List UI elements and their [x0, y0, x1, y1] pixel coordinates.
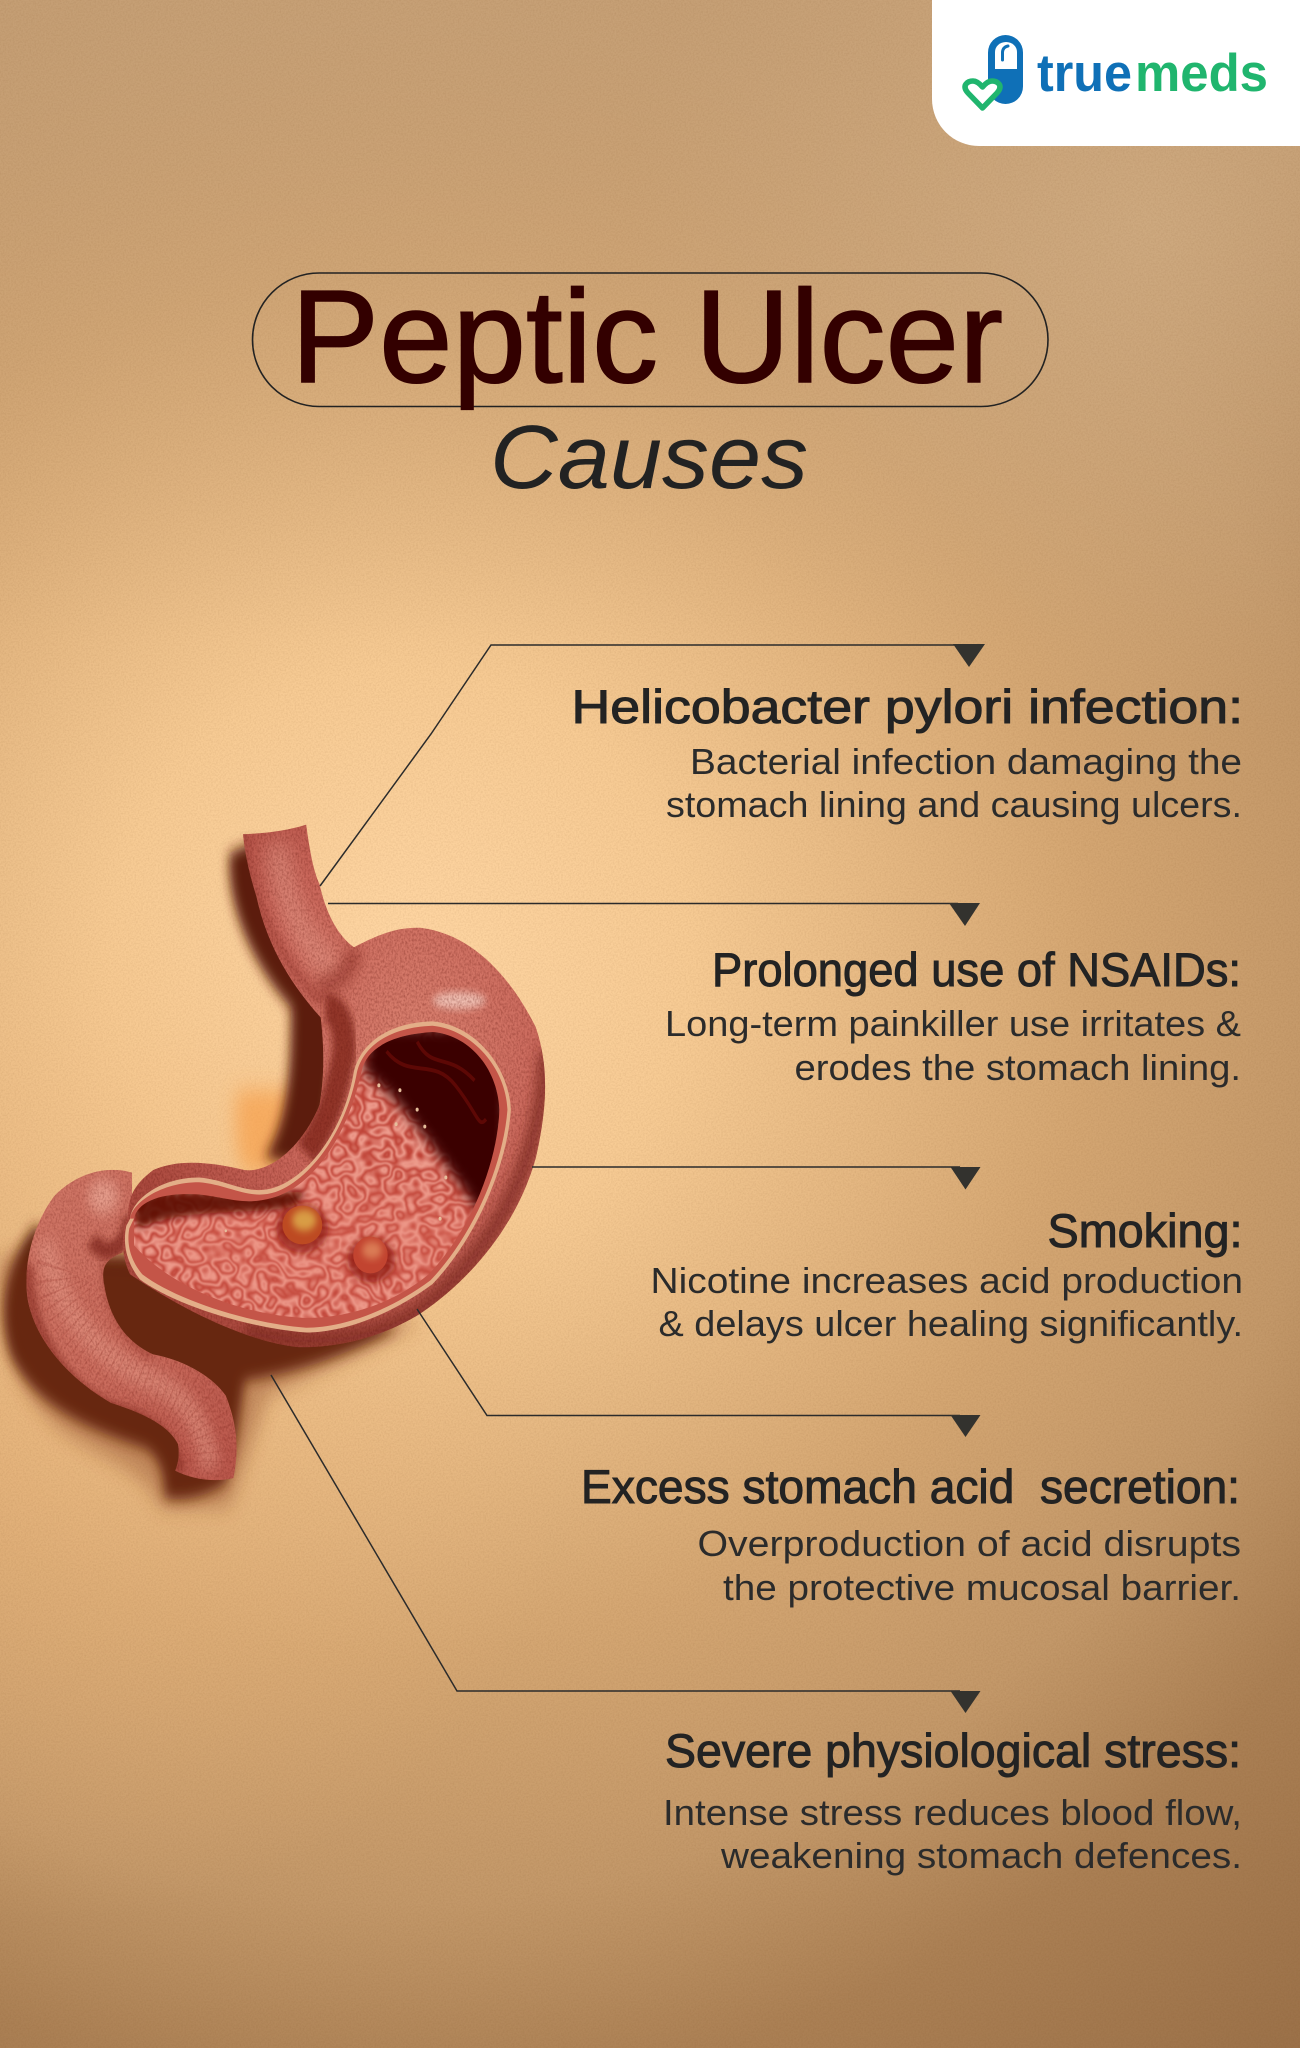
logo panel: truemeds [932, 0, 1300, 146]
logo wordmark: meds [1135, 44, 1268, 103]
arrow 2 [949, 903, 980, 926]
cause text: Severe physiological stress [663, 1724, 1242, 1876]
cause text: Smoking: Nicotine increases acid production [650, 1260, 1243, 1301]
cause text: Excess stomach acid secretion: Overproduction of acid disrupts [698, 1523, 1241, 1564]
arrow 4 [950, 1415, 980, 1437]
cause text: Helicobacter pylori infection: Helicobacter pylori infection: [572, 680, 1243, 733]
cause text: Prolonged use of NSAIDs [665, 943, 1241, 1088]
ulcer 1 [276, 1204, 328, 1253]
cause text: Severe physiological stress: Severe physiological stress: [665, 1724, 1241, 1777]
cause text: Helicobacter pylori infection [572, 680, 1243, 825]
mucosa highlights [225, 1083, 447, 1232]
ulcer 2 [347, 1237, 395, 1282]
icon: heart [965, 81, 1000, 108]
stomach interior [134, 1032, 500, 1318]
icon: capsule [988, 35, 1023, 104]
duodenum [26, 1170, 236, 1480]
stomach shadow [0, 843, 421, 1507]
cause text: Prolonged use of NSAIDs: erodes the stomach lining. [794, 1047, 1241, 1088]
cause text: Severe physiological stress: Intense stress reduces blood flow, [663, 1792, 1242, 1833]
cut rim [125, 1021, 511, 1333]
arrow 3 [950, 1167, 980, 1190]
leader line: Smoking [532, 1166, 960, 1168]
cause text: Severe physiological stress: weakening stomach defences. [720, 1835, 1242, 1876]
cause text: Smoking: Smoking: [1048, 1204, 1242, 1257]
arrow 5 [950, 1691, 980, 1713]
cut wall band [128, 1026, 507, 1328]
stomach illustration [0, 819, 555, 1507]
title text: Peptic Ulcer [291, 263, 1003, 410]
cause text: Prolonged use of NSAIDs: Prolonged use of NSAIDs: [712, 943, 1241, 996]
cause text: Helicobacter pylori infection: stomach lining and causing ulcers. [666, 784, 1242, 825]
cause text: Smoking [650, 1204, 1243, 1344]
subtitle: Causes [490, 408, 808, 508]
cause text: Excess stomach acid secretion: the protective mucosal barrier. [723, 1567, 1241, 1608]
leader line: Helicobacter pylori [320, 645, 962, 886]
cause text: Prolonged use of NSAIDs: Long-term painkiller use irritates & [665, 1003, 1241, 1044]
logo wordmark: true [1037, 44, 1132, 103]
leader line: Severe stress [271, 1375, 960, 1691]
arrow 1 [953, 644, 985, 667]
cause text: Smoking: & delays ulcer healing significantly. [658, 1303, 1243, 1344]
title [252, 263, 1048, 410]
leader line: Excess acid [417, 1309, 960, 1416]
cause text: Excess stomach acid secretion [581, 1460, 1241, 1608]
stomach body and esophagus [115, 819, 555, 1357]
leader line: NSAIDs [328, 902, 958, 904]
logo wordmark [1037, 44, 1268, 103]
title pill outline [252, 273, 1048, 406]
cause text: Excess stomach acid secretion: Excess stomach acid secretion: [581, 1460, 1240, 1513]
cause text: Helicobacter pylori infection: Bacterial infection damaging the [690, 741, 1242, 782]
